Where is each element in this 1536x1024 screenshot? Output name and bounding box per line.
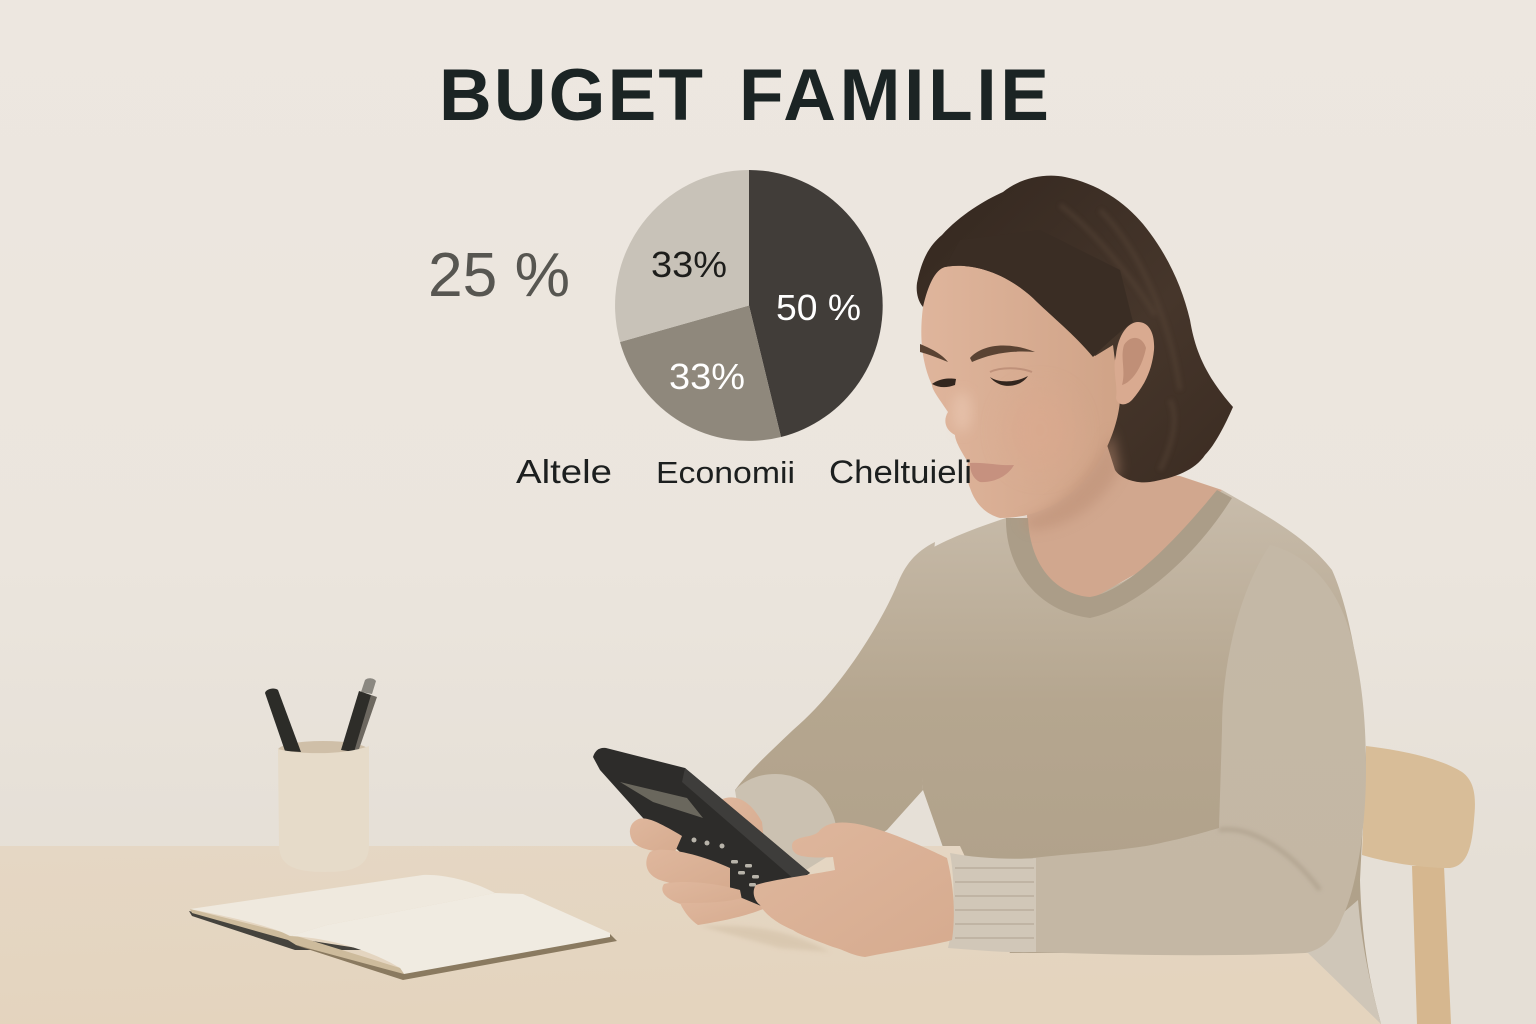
legend: Altele: Altele: [516, 453, 612, 490]
left cover: [189, 911, 370, 950]
title: [439, 55, 1049, 136]
lower body edge: [1300, 900, 1381, 1024]
eyebrow left: [920, 344, 948, 362]
calculator body: [593, 748, 810, 907]
nose highlight: [952, 392, 972, 432]
woman torso: [915, 490, 1381, 1024]
label: 33% light slice: 33%: [651, 244, 727, 285]
side percentage: 25 %: 25 %: [428, 241, 570, 310]
sleeve fold: [1219, 829, 1320, 890]
page edges: [190, 909, 404, 974]
hand shadow on table: [700, 926, 830, 952]
eyebrow right: [970, 345, 1035, 362]
pen cup with pens: [265, 678, 377, 872]
woman head and arms: [593, 176, 1366, 957]
ear: [1115, 322, 1154, 404]
chair: [1362, 746, 1475, 1024]
sweater body: [915, 490, 1381, 1024]
mouth: [970, 463, 1014, 482]
face: [921, 266, 1120, 518]
pie chart: [615, 170, 883, 441]
finger 4 and palm: [680, 898, 766, 925]
eye right: [990, 376, 1028, 386]
pen: left: [265, 689, 301, 752]
pen: right: [341, 691, 371, 752]
cup body: [278, 746, 369, 872]
open notebook: [189, 875, 617, 980]
neck: [1026, 420, 1222, 600]
left upper arm: [735, 542, 935, 838]
legend labels: [516, 453, 972, 490]
table: [0, 846, 1381, 1024]
pen clicker: [361, 678, 376, 694]
right hand: [754, 822, 954, 957]
cheek shading: [1005, 390, 1075, 470]
ear inner: [1122, 338, 1146, 385]
label: 33% mid slice: 33%: [669, 356, 745, 397]
title: FAMILIE: [739, 55, 1049, 136]
slice: Cheltuieli 50%: [749, 170, 883, 437]
left hand fingers: [630, 818, 766, 925]
collar: [1006, 490, 1232, 618]
right cover: [295, 933, 617, 980]
label: 50% dark slice: 50 %: [776, 287, 861, 328]
eye left: [932, 379, 956, 387]
legend: Economii: Economii: [656, 455, 795, 490]
calculator: [593, 748, 810, 907]
calculator buttons: [692, 838, 759, 886]
eyelid crease: [990, 368, 1032, 372]
right cuff: [948, 853, 1036, 952]
cup rim back: [278, 741, 368, 759]
title: BUGET: [439, 55, 703, 136]
right sleeve: [1030, 545, 1366, 955]
finger 1: [630, 818, 682, 852]
right page: [290, 893, 610, 974]
cuff ribs: [955, 868, 1034, 938]
left sleeve cuff: [735, 774, 836, 880]
slice: Economii 33%: [620, 306, 781, 441]
pen: grey behind: [348, 695, 377, 752]
hair highlights: [1060, 205, 1180, 470]
calculator spine: [682, 768, 810, 880]
left page: [190, 875, 495, 936]
legend: Cheltuieli: Cheltuieli: [829, 454, 972, 490]
hair over temple: [945, 230, 1133, 357]
hair: [917, 176, 1233, 482]
left hand behind calculator: [720, 797, 766, 860]
slice: Altele 33%: [615, 170, 749, 342]
jaw shadow: [1020, 430, 1120, 530]
calculator screen: [620, 782, 703, 818]
chair back: [1362, 746, 1475, 868]
chair post: [1412, 866, 1451, 1024]
finger 3: [662, 882, 742, 909]
finger 2: [646, 850, 730, 889]
